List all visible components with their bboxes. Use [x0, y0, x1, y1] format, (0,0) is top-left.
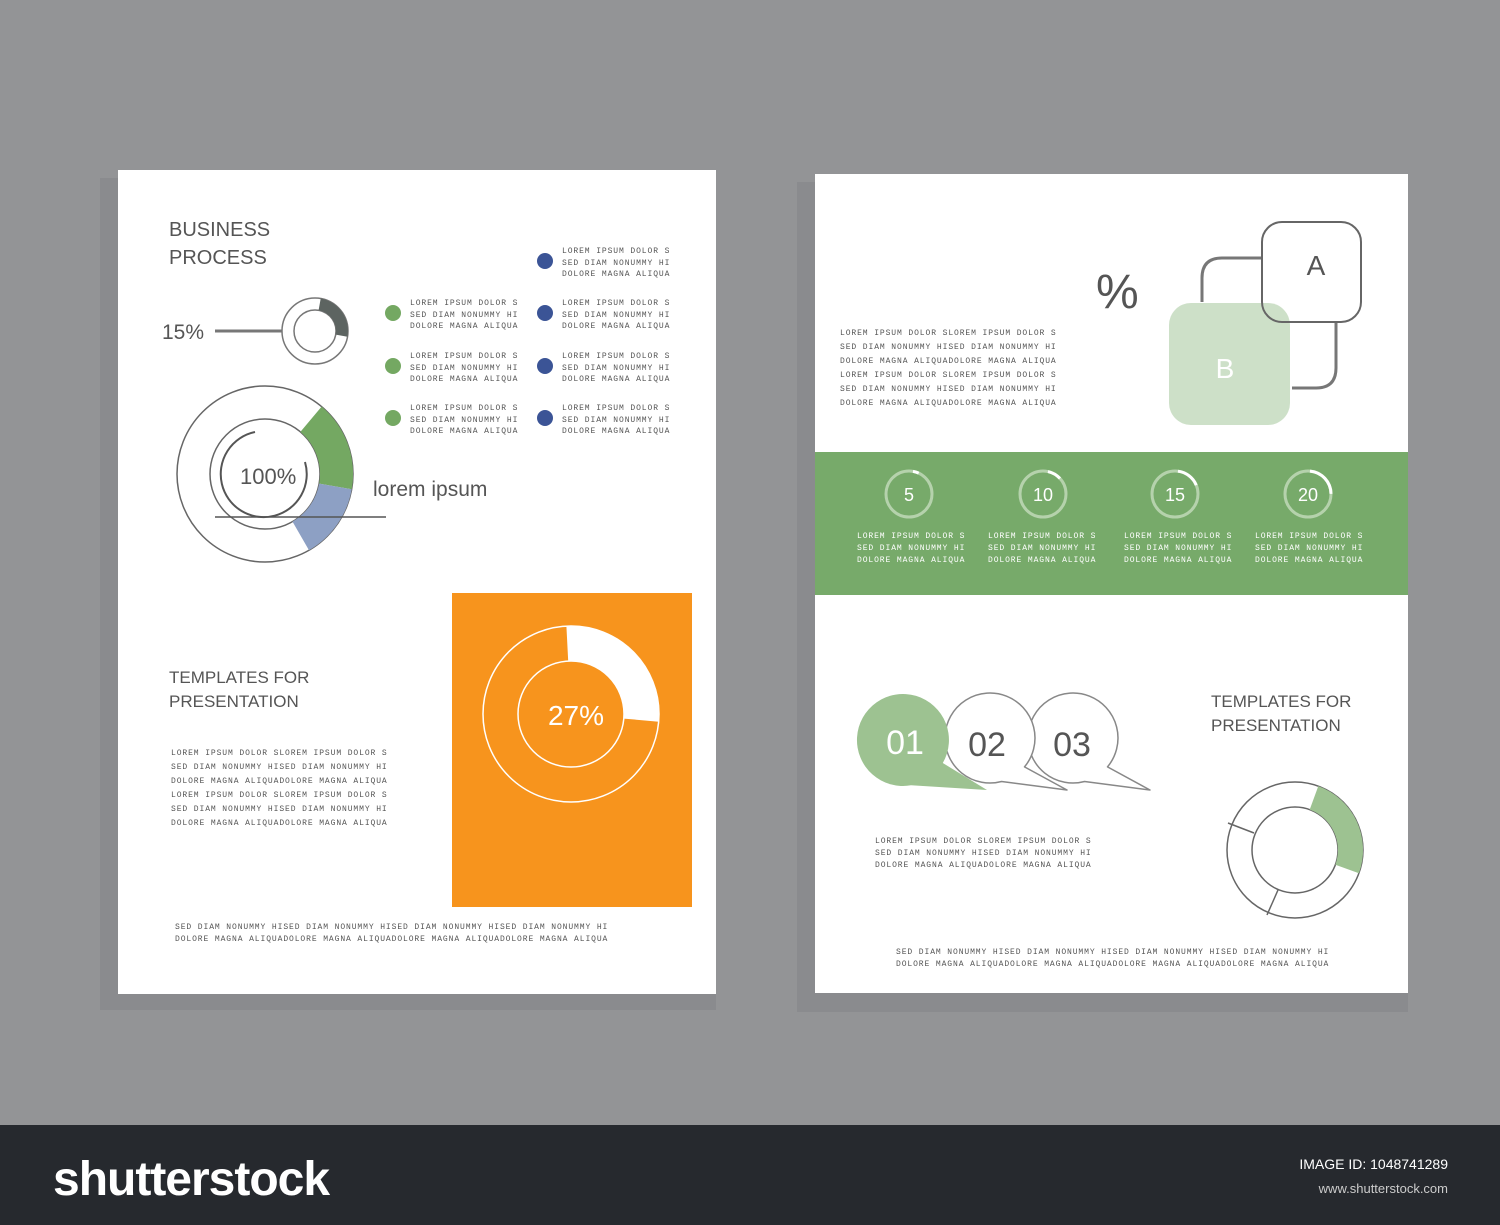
panel: green band with progress circles: DOLORE MAGNA ALIQUA — [988, 556, 1096, 565]
text block: DOLORE MAGNA ALIQUADOLORE MAGNA ALIQUA — [171, 819, 388, 828]
text block: LOREM IPSUM DOLOR SLOREM IPSUM DOLOR S — [840, 329, 1057, 338]
panel: orange 27% chart — [452, 593, 692, 907]
legend bullets: LOREM IPSUM DOLOR S — [410, 404, 518, 413]
legend bullets: LOREM IPSUM DOLOR S — [562, 404, 670, 413]
heading: templates for presentation: PRESENTATION — [1211, 716, 1341, 735]
legend bullets: SED DIAM NONUMMY HI — [562, 311, 670, 320]
legend bullets: DOLORE MAGNA ALIQUA — [562, 375, 670, 384]
legend bullets: DOLORE MAGNA ALIQUA — [562, 322, 670, 331]
text block: LOREM IPSUM DOLOR SLOREM IPSUM DOLOR S — [171, 749, 388, 758]
legend bullets: SED DIAM NONUMMY HI — [410, 311, 518, 320]
speech bubbles 01 02 03: 03 — [1053, 726, 1091, 764]
panel: green band with progress circles: DOLORE MAGNA ALIQUA — [857, 556, 965, 565]
panel: orange 27% chart: 27% — [548, 700, 604, 731]
diagram: A B boxes: B — [1216, 353, 1234, 384]
text block: LOREM IPSUM DOLOR SLOREM IPSUM DOLOR S — [840, 371, 1057, 380]
text block: DOLORE MAGNA ALIQUADOLORE MAGNA ALIQUA — [171, 777, 388, 786]
text block: SED DIAM NONUMMY HISED DIAM NONUMMY HI — [840, 385, 1057, 394]
legend bullets: LOREM IPSUM DOLOR S — [410, 299, 518, 308]
footer text: DOLORE MAGNA ALIQUADOLORE MAGNA ALIQUADOLORE MAGNA ALIQUADOLORE MAGNA ALIQUA — [896, 960, 1329, 969]
legend bullets: SED DIAM NONUMMY HI — [410, 416, 518, 425]
chart: 15% small donut — [162, 298, 348, 364]
diagram: A B boxes — [1169, 222, 1361, 425]
panel: green band with progress circles: 15 — [1165, 485, 1185, 505]
legend bullets: DOLORE MAGNA ALIQUA — [562, 270, 670, 279]
speech bubbles 01 02 03 — [857, 693, 1150, 790]
heading: business process — [169, 219, 270, 269]
chart: 100% big donut: 100% — [240, 464, 296, 489]
footer text — [175, 923, 608, 944]
heading: templates for presentation — [169, 668, 309, 711]
panel: green band with progress circles: LOREM IPSUM DOLOR S — [857, 532, 965, 541]
text block — [171, 749, 388, 828]
heading: templates for presentation: PRESENTATION — [169, 692, 299, 711]
panel: green band with progress circles: LOREM IPSUM DOLOR S — [1124, 532, 1232, 541]
heading: business process: PROCESS — [169, 247, 267, 269]
chart: 100% big donut — [177, 386, 487, 562]
panel: green band with progress circles: SED DIAM NONUMMY HI — [1255, 544, 1363, 553]
legend bullets: LOREM IPSUM DOLOR S — [562, 352, 670, 361]
text block — [840, 329, 1057, 408]
chart: 15% small donut: 15% — [162, 321, 204, 344]
legend bullets: DOLORE MAGNA ALIQUA — [410, 322, 518, 331]
text block — [875, 837, 1092, 870]
legend bullets: LOREM IPSUM DOLOR S — [562, 299, 670, 308]
footer bar: shutterstock — [53, 1153, 330, 1206]
chart: 100% big donut: lorem ipsum — [373, 478, 487, 501]
text block: DOLORE MAGNA ALIQUADOLORE MAGNA ALIQUA — [840, 357, 1057, 366]
panel: green band with progress circles: 5 — [904, 485, 914, 505]
legend bullets: DOLORE MAGNA ALIQUA — [562, 427, 670, 436]
chart: right donut — [1227, 782, 1363, 918]
speech bubbles 01 02 03: 01 — [886, 724, 924, 762]
text block: LOREM IPSUM DOLOR SLOREM IPSUM DOLOR S — [171, 791, 388, 800]
footer text: DOLORE MAGNA ALIQUADOLORE MAGNA ALIQUADOLORE MAGNA ALIQUADOLORE MAGNA ALIQUA — [175, 935, 608, 944]
legend bullets: SED DIAM NONUMMY HI — [562, 364, 670, 373]
panel: green band with progress circles: LOREM IPSUM DOLOR S — [988, 532, 1096, 541]
panel: green band with progress circles: 10 — [1033, 485, 1053, 505]
text block: SED DIAM NONUMMY HISED DIAM NONUMMY HI — [840, 343, 1057, 352]
heading: templates for presentation — [1211, 692, 1351, 735]
legend bullets: SED DIAM NONUMMY HI — [562, 259, 670, 268]
diagram: A B boxes: A — [1307, 250, 1326, 281]
footer bar: IMAGE ID: 1048741289 — [1299, 1156, 1448, 1172]
legend bullets: SED DIAM NONUMMY HI — [410, 364, 518, 373]
heading: business process: BUSINESS — [169, 219, 270, 241]
text block: LOREM IPSUM DOLOR SLOREM IPSUM DOLOR S — [875, 837, 1092, 846]
text block: DOLORE MAGNA ALIQUADOLORE MAGNA ALIQUA — [875, 861, 1092, 870]
panel: left page — [100, 170, 716, 1010]
panel: green band with progress circles: LOREM IPSUM DOLOR S — [1255, 532, 1363, 541]
legend bullets: DOLORE MAGNA ALIQUA — [410, 375, 518, 384]
text block: SED DIAM NONUMMY HISED DIAM NONUMMY HI — [171, 805, 388, 814]
legend bullets: SED DIAM NONUMMY HI — [562, 416, 670, 425]
legend bullets: DOLORE MAGNA ALIQUA — [410, 427, 518, 436]
icon: percent sign: % — [1096, 266, 1139, 319]
panel: right page — [797, 174, 1408, 1012]
panel: green band with progress circles — [815, 452, 1408, 595]
text block: SED DIAM NONUMMY HISED DIAM NONUMMY HI — [171, 763, 388, 772]
panel: green band with progress circles: SED DIAM NONUMMY HI — [857, 544, 965, 553]
footer text: SED DIAM NONUMMY HISED DIAM NONUMMY HISED DIAM NONUMMY HISED DIAM NONUMMY HI — [896, 948, 1329, 957]
panel: green band with progress circles: SED DIAM NONUMMY HI — [988, 544, 1096, 553]
panel: green band with progress circles: DOLORE MAGNA ALIQUA — [1124, 556, 1232, 565]
panel: green band with progress circles: SED DIAM NONUMMY HI — [1124, 544, 1232, 553]
legend bullets: LOREM IPSUM DOLOR S — [410, 352, 518, 361]
heading: templates for presentation: TEMPLATES FOR — [169, 668, 309, 687]
footer bar: www.shutterstock.com — [1318, 1181, 1448, 1196]
footer bar — [0, 1125, 1500, 1225]
speech bubbles 01 02 03: 02 — [968, 726, 1006, 764]
text block: SED DIAM NONUMMY HISED DIAM NONUMMY HI — [875, 849, 1092, 858]
heading: templates for presentation: TEMPLATES FOR — [1211, 692, 1351, 711]
panel: green band with progress circles: 20 — [1298, 485, 1318, 505]
text block: DOLORE MAGNA ALIQUADOLORE MAGNA ALIQUA — [840, 399, 1057, 408]
footer text — [896, 948, 1329, 969]
footer text: SED DIAM NONUMMY HISED DIAM NONUMMY HISED DIAM NONUMMY HISED DIAM NONUMMY HI — [175, 923, 608, 932]
panel: green band with progress circles: DOLORE MAGNA ALIQUA — [1255, 556, 1363, 565]
legend bullets: LOREM IPSUM DOLOR S — [562, 247, 670, 256]
legend bullets — [385, 247, 670, 436]
